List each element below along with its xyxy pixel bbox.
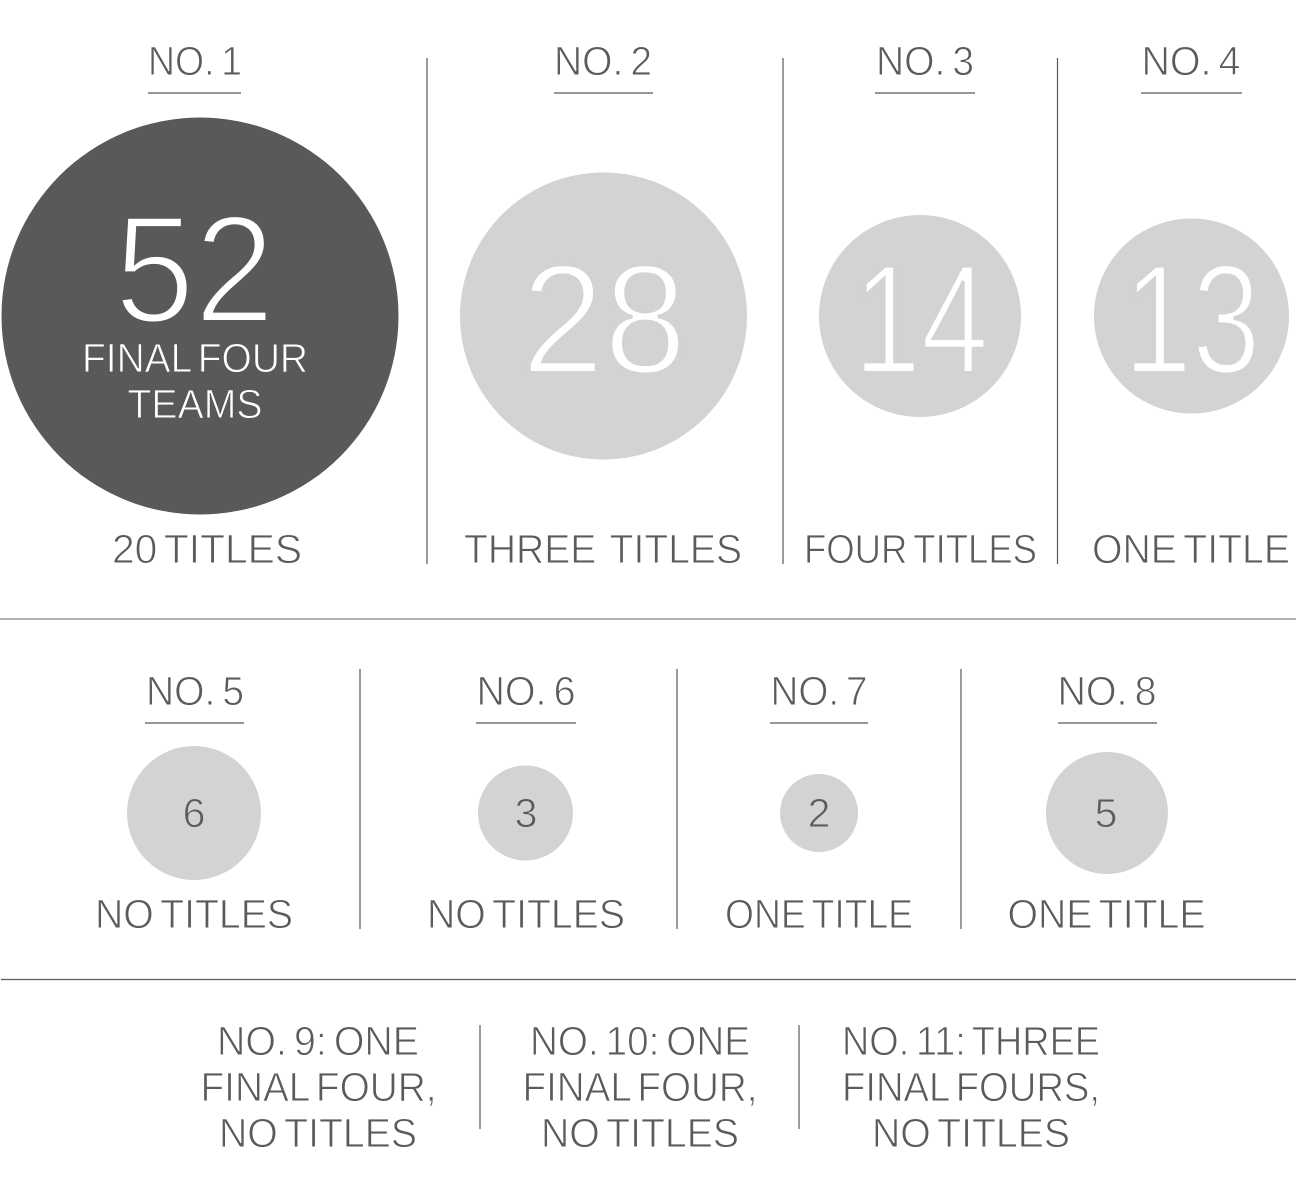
panel: no. 3 (804, 38, 1037, 572)
heading: no. 3: NO. 3 (876, 38, 974, 84)
heading: no. 7: NO. 7 (770, 668, 868, 714)
label: 20 titles: 20 TITLES (112, 526, 302, 572)
heading: no. 8: NO. 8 (1058, 668, 1156, 714)
circle: 2 (780, 774, 858, 852)
circle: 52 final four teams: 52 (114, 184, 274, 355)
circle: 5 (1046, 752, 1168, 874)
circle: 6: 6 (183, 790, 205, 836)
heading: no. 1: NO. 1 (148, 38, 242, 84)
circle: 28 (460, 172, 747, 460)
text block: no. 9: NO. 9: ONE (217, 1018, 419, 1064)
text block: no. 10 (522, 1018, 758, 1156)
panel: no. 7 (725, 668, 913, 937)
heading: no. 5: NO. 5 (146, 668, 244, 714)
heading: no. 4: NO. 4 (1142, 38, 1240, 84)
heading: no. 6: NO. 6 (476, 668, 576, 714)
label: four titles: FOUR TITLES (804, 526, 1037, 572)
circle: 28: 28 (522, 233, 686, 407)
panel: no. 2 (460, 38, 747, 572)
circle: 52 final four teams (2, 118, 398, 514)
panel: no. 1 (2, 38, 398, 572)
circle: 3: 3 (515, 790, 537, 836)
text block: no. 10: NO. 10: ONE (530, 1018, 750, 1064)
panel: no. 4 (1092, 38, 1290, 572)
circle: 6 (127, 746, 261, 880)
text block: no. 10: NO TITLES (541, 1110, 739, 1156)
circle: 5: 5 (1095, 790, 1117, 836)
label: no titles: NO TITLES (427, 891, 625, 937)
text block: no. 9: FINAL FOUR, (200, 1064, 436, 1110)
circle: 14 (819, 215, 1021, 417)
text block: no. 10: FINAL FOUR, (522, 1064, 758, 1110)
heading: no. 2: NO. 2 (554, 38, 652, 84)
circle: 52 final four teams: FINAL FOUR (82, 335, 308, 381)
label: one title: ONE TITLE (1008, 891, 1206, 937)
text block: no. 11 (842, 1018, 1100, 1156)
label: no titles: NO TITLES (95, 891, 293, 937)
label: one title: ONE TITLE (1092, 526, 1290, 572)
label: one title: ONE TITLE (725, 891, 913, 937)
circle: 3 (478, 766, 573, 860)
circle: 52 final four teams: TEAMS (128, 381, 262, 427)
circle: 14: 14 (854, 233, 988, 407)
text block: no. 9: NO TITLES (219, 1110, 417, 1156)
circle: 13: 13 (1124, 233, 1260, 407)
circle: 2: 2 (808, 790, 830, 836)
panel: no. 5 (95, 668, 293, 937)
label: three titles: THREE TITLES (464, 526, 742, 572)
text block: no. 11: FINAL FOURS, (842, 1064, 1100, 1110)
text block: no. 11: NO. 11: THREE (842, 1018, 1100, 1064)
panel: no. 8 (1008, 668, 1206, 937)
panel: no. 6 (427, 668, 625, 937)
text block: no. 9 (200, 1018, 436, 1156)
text block: no. 11: NO TITLES (872, 1110, 1070, 1156)
